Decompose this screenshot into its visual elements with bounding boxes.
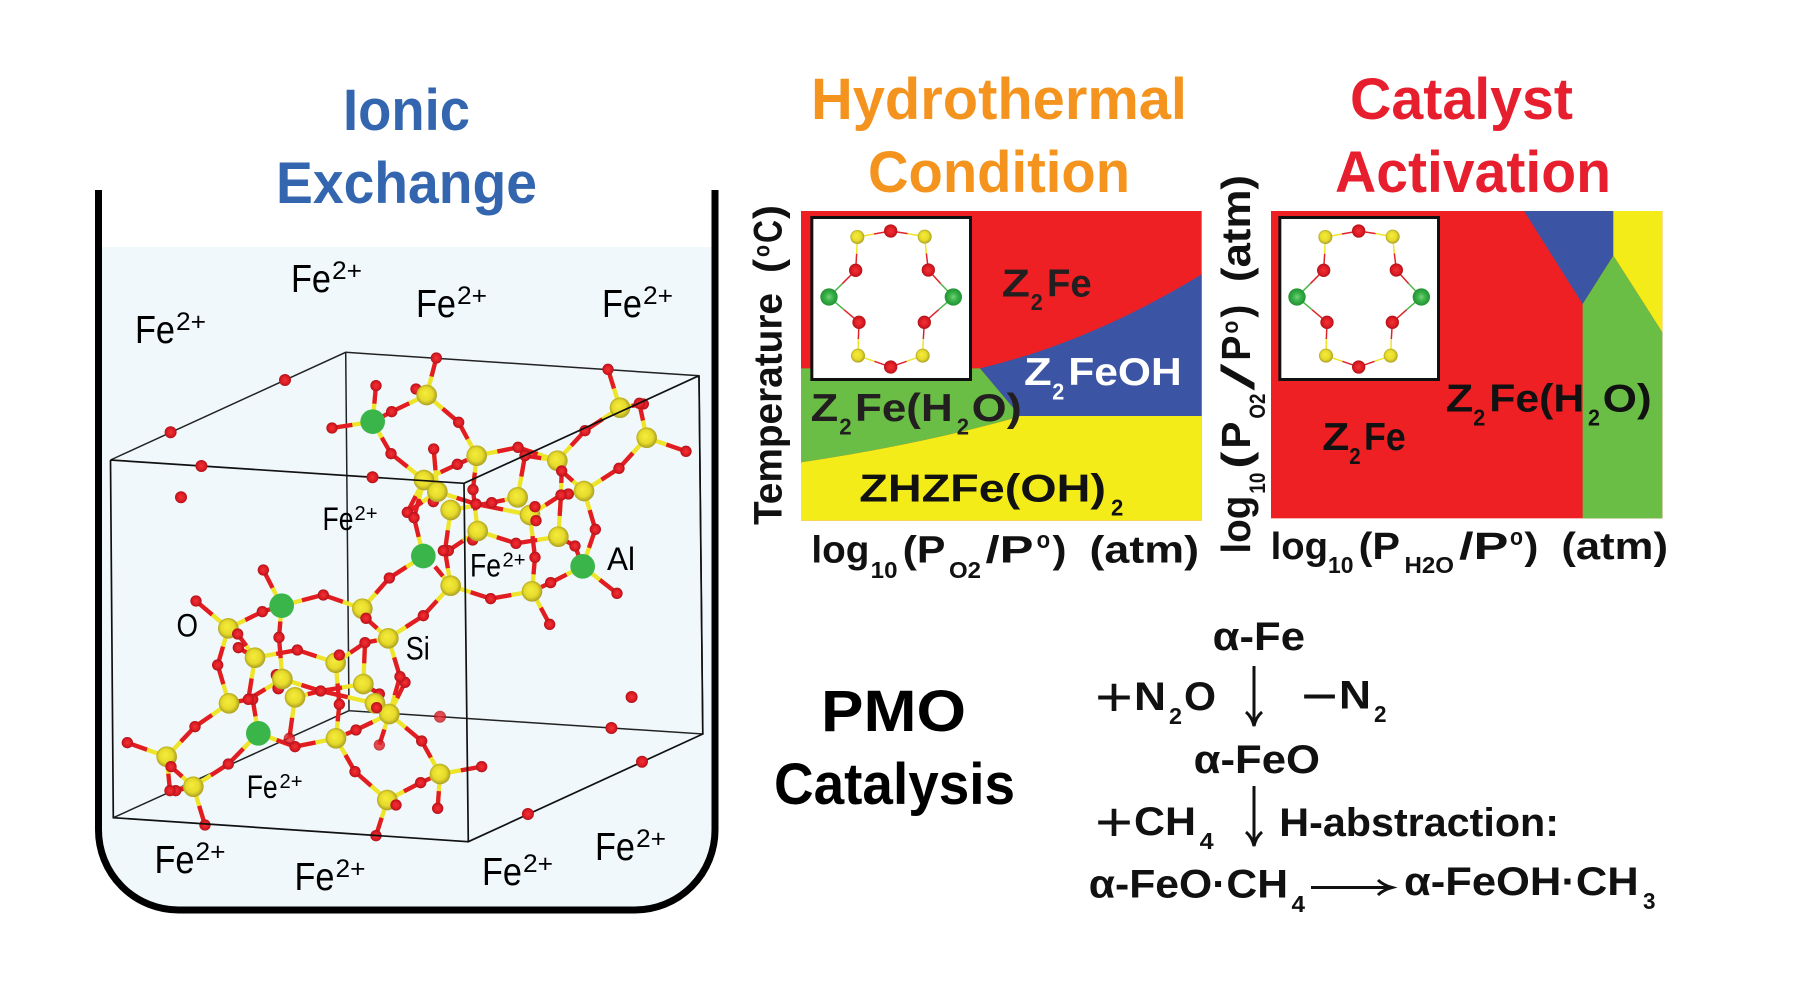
- y axis label: log10(PO2/Po): P: [1213, 336, 1259, 361]
- large Fe2+ ion labels: 2+: [636, 825, 666, 853]
- species: alpha-Fe: α-Fe: [1213, 615, 1305, 659]
- y axis label: log10(PO2/Po): 10: [1245, 473, 1270, 494]
- heading: catalyst activation: [1335, 67, 1611, 205]
- large Fe2+ ion labels: Fe: [135, 309, 175, 352]
- y axis label: temperature: o: [748, 245, 774, 257]
- large Fe2+ ion labels: Fe: [595, 826, 635, 869]
- heading: ionic exchange: [276, 78, 537, 216]
- region label: Z2Fe: [1002, 263, 1092, 315]
- small Fe2+ ion labels: [247, 501, 525, 805]
- y axis label: log10(PO2/Po): [1212, 175, 1270, 554]
- species: alpha-FeO.CH4: 4: [1292, 891, 1305, 917]
- y axis label: temperature: C: [746, 220, 790, 243]
- region label: Z2Fe(H2O): Z: [1446, 378, 1473, 421]
- y axis label: temperature: ): [746, 205, 790, 219]
- large Fe2+ ion labels: Fe: [154, 839, 194, 882]
- species: alpha-FeOH.CH3: [1404, 860, 1656, 914]
- large Fe2+ ion labels: 2+: [457, 282, 487, 310]
- atom label: O: O: [176, 608, 198, 644]
- large Fe2+ ion labels: 2+: [196, 838, 226, 866]
- phase diagram: hydrothermal condition: [801, 211, 1202, 521]
- species: alpha-FeO.CH4: α-FeO·CH: [1089, 863, 1288, 907]
- large Fe2+ ion labels: 2+: [643, 282, 673, 310]
- x axis label: log10(PO2/Po): (P: [903, 530, 945, 572]
- reaction scheme: [1089, 615, 1656, 917]
- product: -N2: −: [1301, 664, 1338, 727]
- large Fe2+ ion labels: 2+: [332, 257, 362, 285]
- region label: Z2Fe(H2O): Fe(H: [855, 387, 953, 430]
- reagent: +CH4: CH: [1134, 800, 1196, 844]
- region label: Z2Fe(H2O): Z: [811, 387, 838, 430]
- atom label: Si: Si: [406, 630, 430, 666]
- arrow: alpha-Fe to alpha-FeO: [1246, 666, 1262, 726]
- x axis label: log10(PO2/Po): 10: [871, 557, 898, 583]
- small Fe2+ ion labels: 2+: [502, 550, 526, 572]
- small Fe2+ ion labels: 2+: [354, 503, 378, 525]
- y axis label: log10(PO2/Po): P: [1213, 422, 1259, 449]
- region label: Z2Fe(H2O): O): [1603, 378, 1652, 421]
- small Fe2+ ion labels: 2+: [280, 771, 302, 793]
- region label: Z2Fe(H2O): 2: [957, 413, 969, 439]
- y axis label: log10(PO2/Po): o: [1217, 321, 1243, 334]
- panel: ionic exchange: [98, 78, 715, 910]
- y axis label: log10(PO2/Po): O2: [1245, 394, 1270, 419]
- zeolite unit cell front edges: [110, 376, 703, 842]
- region label: Z2FeOH: [1024, 351, 1182, 404]
- heading: ionic exchange: Ionic: [343, 78, 470, 143]
- region label: Z2Fe(H2O): [811, 387, 1022, 439]
- region label: ZHZFe(OH)2: 2: [1111, 495, 1123, 521]
- isolated oxygen atoms: [165, 374, 648, 820]
- x axis label: log10(PO2/Po): ): [1052, 530, 1066, 572]
- region label: Z2Fe: 2: [1349, 443, 1361, 469]
- x axis label: log10(PH2O/Po): 10: [1328, 552, 1354, 578]
- reagent: +N2O: 2: [1169, 703, 1182, 729]
- x axis label: log10(PH2O/Po): [1271, 524, 1668, 578]
- x axis label: log10(PH2O/Po): /P: [1459, 526, 1508, 568]
- species: alpha-FeO.CH4: [1089, 863, 1305, 917]
- arrow: alpha-FeO to complex: [1246, 786, 1262, 846]
- y axis label: log10(PO2/Po): log: [1213, 496, 1259, 554]
- region label: Z2Fe: Fe: [1047, 263, 1092, 306]
- x axis label: log10(PH2O/Po): (atm): [1561, 526, 1668, 568]
- y axis label: log10(PO2/Po): /: [1212, 363, 1264, 391]
- arrow: H-abstraction: [1311, 880, 1392, 895]
- heading: ionic exchange: Exchange: [276, 151, 537, 216]
- product: -N2: N: [1339, 673, 1371, 717]
- x axis label: log10(PO2/Po): (atm): [1090, 530, 1199, 572]
- reagent: +N2O: +: [1095, 665, 1133, 728]
- y axis label: temperature: Temperature: [746, 293, 790, 525]
- species: alpha-FeOH.CH3: 3: [1643, 888, 1656, 914]
- large Fe2+ ion labels: Fe: [416, 283, 456, 326]
- x axis label: log10(PH2O/Po): ): [1524, 526, 1538, 568]
- atom label: Al: Al: [607, 541, 635, 577]
- reagent: +N2O: O: [1184, 675, 1216, 719]
- beaker liquid: [100, 247, 714, 910]
- beaker outline: [98, 190, 715, 910]
- product: -N2: 2: [1374, 701, 1386, 727]
- species: alpha-FeO: α-FeO: [1194, 738, 1320, 782]
- product: -N2: [1301, 664, 1386, 727]
- x axis label: log10(PH2O/Po): H2O: [1404, 552, 1454, 578]
- region label: Z2Fe: 2: [1031, 289, 1043, 315]
- small Fe2+ ion labels: Fe: [247, 769, 278, 805]
- y axis label: temperature: (: [746, 258, 790, 273]
- region label: Z2Fe(H2O): Fe(H: [1489, 378, 1584, 421]
- zeolite unit cell back edges: [110, 352, 703, 818]
- large Fe2+ ion labels: Fe: [602, 283, 642, 326]
- zeolite framework molecule: [122, 352, 692, 841]
- heading: PMO catalysis: Catalysis: [774, 752, 1015, 817]
- region label: Z2Fe(H2O): 2: [1588, 405, 1600, 431]
- species: alpha-FeOH.CH3: α-FeOH·CH: [1404, 860, 1639, 904]
- heading: PMO catalysis: [774, 679, 1015, 817]
- region label: Z2Fe: [1322, 416, 1406, 469]
- heading: PMO catalysis: PMO: [821, 679, 966, 744]
- region label: Z2Fe(H2O): 2: [1473, 405, 1485, 431]
- label: H-abstraction: H-abstraction:: [1279, 801, 1559, 845]
- small Fe2+ ion labels: Fe: [470, 548, 501, 584]
- x axis label: log10(PH2O/Po): (P: [1359, 526, 1400, 568]
- region label: Z2Fe: Z: [1322, 416, 1349, 459]
- inset: zeolite ring: [812, 217, 970, 379]
- region label: Z2Fe(H2O): [1446, 378, 1652, 431]
- region label: Z2Fe: Fe: [1364, 416, 1406, 459]
- y axis label: log10(PO2/Po): (atm): [1213, 175, 1259, 282]
- large Fe2+ ion labels: Fe: [482, 851, 522, 894]
- region label: Z2FeOH: FeOH: [1068, 351, 1182, 394]
- large Fe2+ ion labels: Fe: [294, 856, 334, 899]
- x axis label: log10(PO2/Po): /P: [986, 530, 1034, 572]
- large Fe2+ ion labels: Fe: [291, 258, 331, 301]
- reagent: +N2O: [1095, 665, 1216, 729]
- x axis label: log10(PO2/Po): o: [1037, 527, 1050, 554]
- reagent: +CH4: [1095, 790, 1214, 854]
- region label: Z2Fe(H2O): 2: [839, 413, 852, 439]
- region label: Z2FeOH: 2: [1052, 378, 1064, 404]
- x axis label: log10(PO2/Po): [811, 527, 1199, 583]
- phase diagram: catalyst activation: [1271, 211, 1662, 518]
- heading: catalyst activation: Activation: [1335, 140, 1611, 205]
- x axis label: log10(PH2O/Po): log: [1271, 526, 1328, 568]
- heading: hydrothermal condition: Condition: [868, 140, 1130, 205]
- large Fe2+ ion labels: 2+: [336, 855, 366, 883]
- large Fe2+ ion labels: 2+: [176, 308, 206, 336]
- reagent: +CH4: +: [1095, 790, 1133, 853]
- region label: Z2FeOH: Z: [1024, 351, 1052, 394]
- heading: hydrothermal condition: [811, 67, 1187, 205]
- inset: zeolite ring: [1280, 217, 1438, 379]
- reagent: +CH4: 4: [1200, 828, 1214, 854]
- x axis label: log10(PO2/Po): log: [811, 530, 869, 572]
- heading: catalyst activation: Catalyst: [1350, 67, 1573, 132]
- region label: Z2Fe: Z: [1002, 263, 1030, 306]
- region label: Z2Fe(H2O): O): [972, 387, 1022, 430]
- reagent: +N2O: N: [1134, 675, 1166, 719]
- y axis label: log10(PO2/Po): ): [1213, 305, 1259, 318]
- region label: ZHZFe(OH)2: [859, 468, 1123, 521]
- x axis label: log10(PH2O/Po): o: [1510, 524, 1523, 551]
- large Fe2+ ion labels: 2+: [523, 850, 553, 878]
- heading: hydrothermal condition: Hydrothermal: [811, 67, 1187, 132]
- large Fe2+ ion labels: [135, 257, 673, 899]
- region label: ZHZFe(OH)2: ZHZFe(OH): [859, 468, 1106, 511]
- x axis label: log10(PO2/Po): O2: [949, 557, 981, 583]
- small Fe2+ ion labels: Fe: [322, 501, 354, 537]
- y axis label: log10(PO2/Po): (: [1213, 451, 1259, 469]
